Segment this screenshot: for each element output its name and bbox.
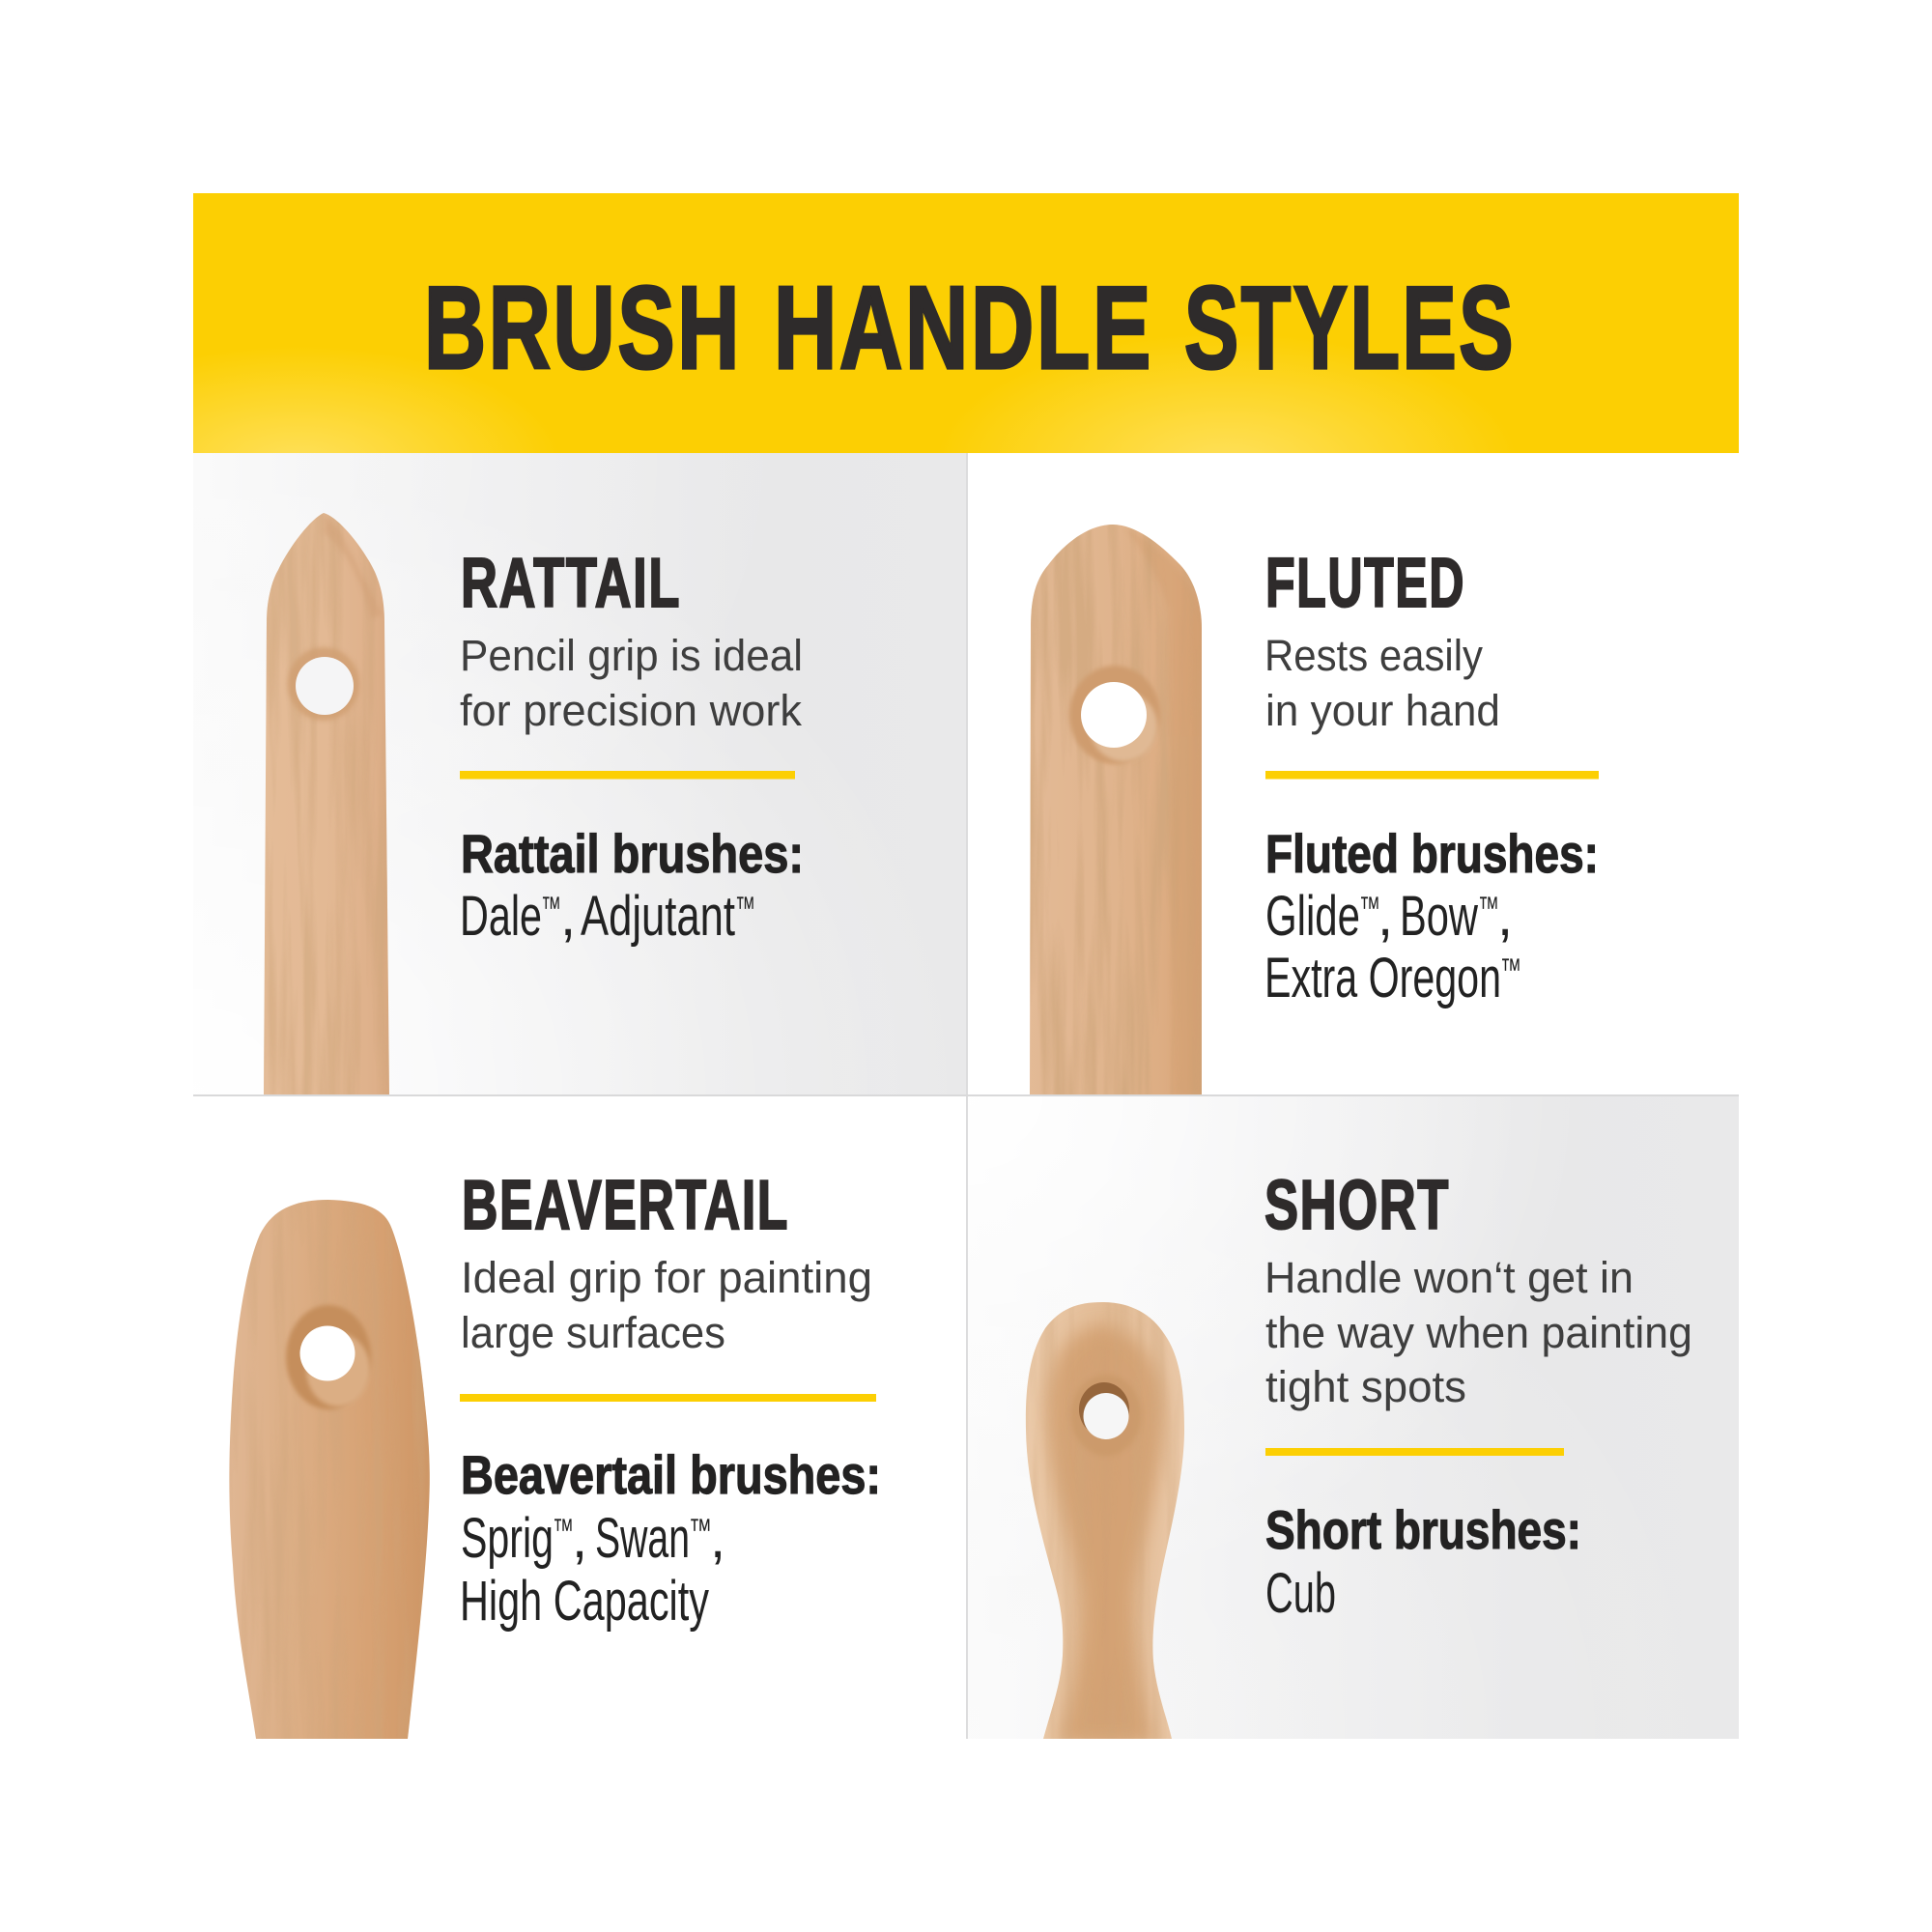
brush list: Dale [460, 885, 542, 948]
brush list: ™ [541, 890, 561, 925]
brush list: Glide [1265, 885, 1360, 948]
icon: beavertail handle [222, 1198, 435, 1741]
icon: rattail handle [264, 513, 389, 1094]
description: Rests easily [1264, 631, 1483, 680]
description: in your hand [1265, 686, 1500, 735]
icon: fluted handle [1024, 522, 1208, 1096]
brush list: ™ [1500, 952, 1521, 987]
brush list: ™ [689, 1512, 712, 1548]
brush list: , [1378, 885, 1393, 948]
subheading: Rattail brushes: [461, 823, 804, 884]
divider [1265, 771, 1599, 779]
brush list: ™ [1478, 890, 1499, 925]
brush list: Bow [1400, 885, 1479, 948]
divider [460, 771, 795, 779]
brush list: ™ [1359, 890, 1380, 925]
subheading: Short brushes: [1265, 1499, 1581, 1560]
brush list: , [572, 1507, 587, 1570]
subheading: Beavertail brushes: [461, 1444, 881, 1505]
brush list: ™ [553, 1512, 574, 1548]
description: tight spots [1265, 1362, 1466, 1411]
brush list: ™ [735, 890, 755, 925]
divider [460, 1394, 876, 1402]
brush list: Cub [1265, 1562, 1336, 1625]
description [1264, 1253, 1692, 1411]
brush list: , [1497, 885, 1513, 948]
description: Pencil grip is ideal [460, 631, 803, 680]
heading: FLUTED [1265, 545, 1465, 622]
title [424, 262, 1516, 393]
title: STYLES [1184, 262, 1516, 393]
description: Handle won‘t get in [1264, 1253, 1634, 1302]
brush list [460, 885, 755, 948]
description: the way when painting [1265, 1308, 1692, 1357]
description: for precision work [460, 686, 802, 735]
brush list: Extra Oregon [1264, 947, 1501, 1009]
divider [1265, 1448, 1564, 1456]
header banner [193, 193, 1739, 453]
brush list [1264, 885, 1521, 1009]
brush list: , [710, 1507, 725, 1570]
brush list: Adjutant [581, 885, 735, 948]
panel: fluted [1030, 525, 1599, 1094]
icon: short handle [1026, 1302, 1184, 1739]
panel: short [967, 1096, 1739, 1744]
description [460, 631, 803, 735]
brush list: Sprig [461, 1507, 554, 1570]
brush list: Swan [595, 1507, 690, 1570]
title: BRUSH [424, 262, 742, 393]
panel: beavertail [229, 1179, 877, 1739]
description: Ideal grip for painting [461, 1253, 872, 1302]
brush list: High Capacity [460, 1570, 709, 1633]
panel: rattail [193, 453, 967, 1096]
brush list [460, 1507, 725, 1633]
heading: RATTAIL [461, 545, 681, 622]
brush list: , [560, 885, 576, 948]
description [1264, 631, 1500, 735]
description: large surfaces [461, 1308, 725, 1357]
description [461, 1253, 872, 1357]
subheading: Fluted brushes: [1265, 823, 1599, 884]
heading: SHORT [1264, 1167, 1450, 1244]
heading: BEAVERTAIL [462, 1167, 789, 1244]
title: HANDLE [774, 262, 1153, 393]
